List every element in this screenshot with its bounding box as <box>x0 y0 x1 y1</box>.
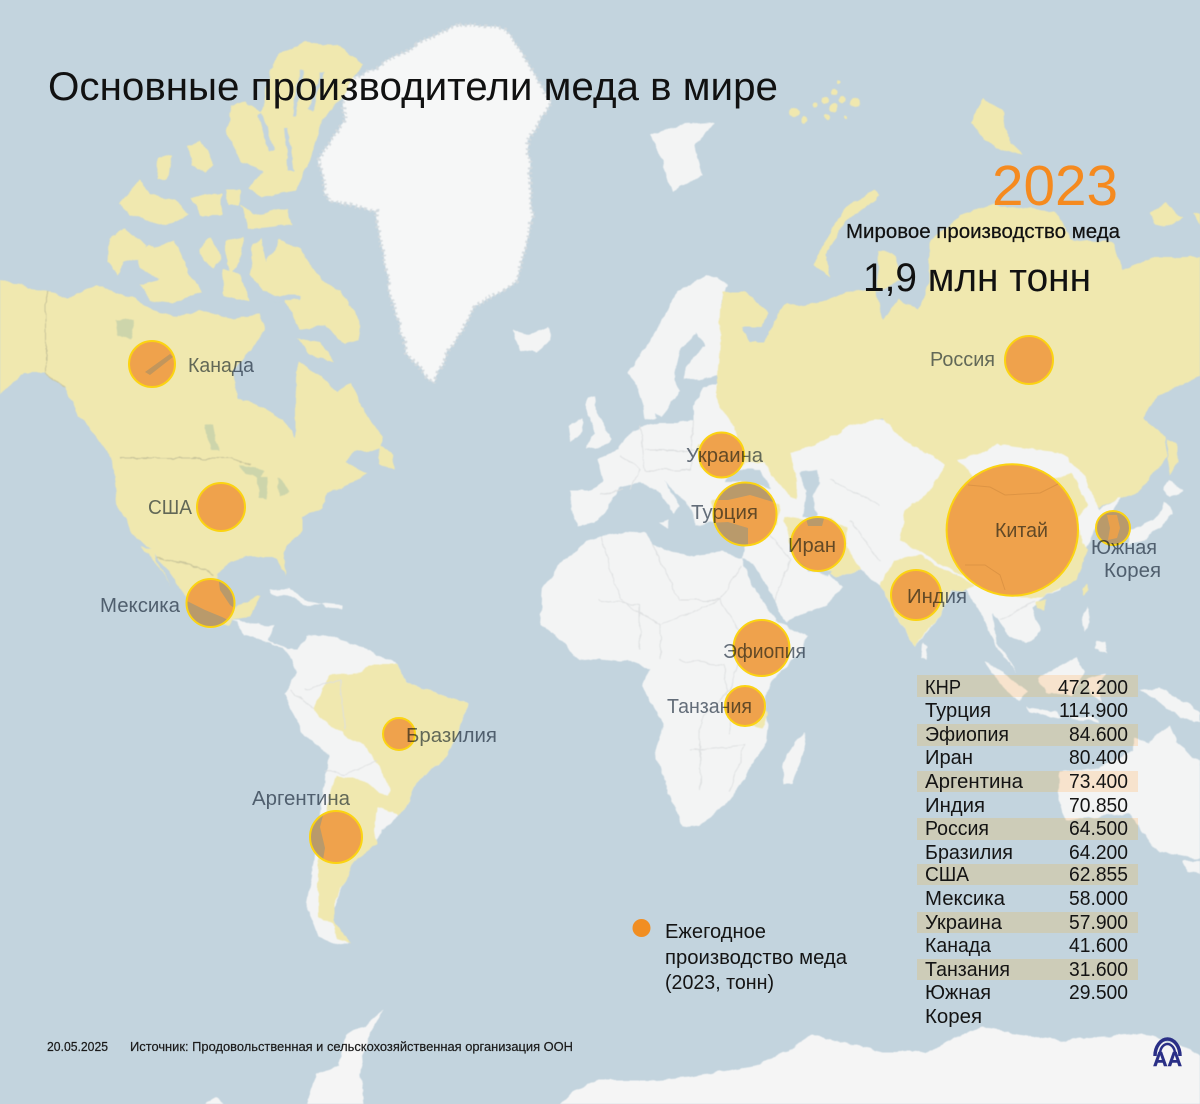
country names: Мексика <box>925 888 1006 910</box>
country names: Турция <box>925 700 991 722</box>
Arctic island <box>226 237 245 275</box>
country names: Индия <box>925 795 985 817</box>
Banks Island <box>108 229 147 275</box>
icon: AA logo <box>1153 1039 1182 1071</box>
label: Украина: Украина <box>686 445 764 467</box>
country names: Корея <box>925 1006 982 1028</box>
Caspian Sea <box>798 470 820 517</box>
bubble: Аргентина <box>308 808 362 866</box>
Somerset Island <box>222 268 250 300</box>
label: Россия: Россия <box>930 349 995 371</box>
bubble: Мексика <box>186 578 236 628</box>
legend <box>632 919 848 994</box>
Hispaniola <box>322 603 343 609</box>
label: Иран: Иран <box>788 535 836 557</box>
bubble: Индия <box>891 570 941 620</box>
source: Источник: Продовольственная и сельскохозяйственная организация ООН <box>130 1040 573 1054</box>
Scandinavia <box>627 275 728 415</box>
Hokkaido <box>1164 480 1183 497</box>
production values: 57.900 <box>1069 912 1128 934</box>
country border lines <box>46 292 250 575</box>
production values: 84.600 <box>1069 724 1128 746</box>
inland seas and bays <box>258 70 833 576</box>
Central and South America base <box>233 619 467 945</box>
Iceland <box>513 327 551 352</box>
production values: 70.850 <box>1069 795 1128 817</box>
summary: world production <box>846 154 1121 300</box>
Tasmania <box>1182 860 1200 874</box>
label: Эфиопия: Эфиопия <box>723 641 806 663</box>
label: Бразилия: Бразилия <box>406 725 497 747</box>
production values: 62.855 <box>1069 864 1128 886</box>
Greenland <box>318 24 551 382</box>
Novaya Zemlya <box>814 190 879 278</box>
Svalbard <box>650 122 715 192</box>
India <box>881 555 975 647</box>
New Guinea <box>1140 687 1200 722</box>
Taiwan <box>1083 583 1089 597</box>
Madagascar <box>782 732 805 784</box>
production values: 58.000 <box>1069 888 1128 910</box>
Cuba <box>270 588 322 604</box>
Victoria Island <box>135 240 203 303</box>
lakes <box>115 320 290 498</box>
Africa <box>540 532 808 827</box>
label: США: США <box>148 497 193 519</box>
Borneo <box>1038 657 1085 695</box>
production values: 73.400 <box>1069 771 1128 793</box>
bubble: Канада <box>129 341 175 387</box>
subtitle: Мировое производство меда <box>846 221 1121 243</box>
production values: 29.500 <box>1069 982 1128 1004</box>
Iran <box>785 517 860 577</box>
Brazil <box>314 665 467 816</box>
production values: 41.600 <box>1069 935 1128 957</box>
New Siberian Islands <box>1151 203 1182 226</box>
Sakhalin <box>1167 440 1178 475</box>
production values <box>1058 677 1128 1004</box>
Ukraine <box>698 437 745 475</box>
icon: AA logo: AA <box>1153 1049 1182 1071</box>
bubble: Китай <box>947 464 1078 596</box>
country names: Бразилия <box>925 842 1013 864</box>
country names: Россия <box>925 818 989 840</box>
bubble: Украина <box>699 432 744 478</box>
title: Основные производители меда в мире <box>48 65 778 109</box>
Baffin Island <box>250 238 361 345</box>
country names: Иран <box>925 747 973 769</box>
legend text: Ежегодное <box>665 921 766 943</box>
Devon island <box>241 204 291 229</box>
country names: КНР <box>925 677 961 699</box>
Turkey <box>712 497 780 525</box>
legend text: (2023, тонн) <box>665 972 774 994</box>
Arctic island <box>191 194 222 215</box>
Lesser Sunda <box>1070 716 1100 722</box>
Newfoundland <box>378 445 396 470</box>
country names: США <box>925 864 970 886</box>
country names: Танзания <box>925 959 1010 981</box>
Mongolia <box>957 443 1080 485</box>
Sicily <box>658 520 670 529</box>
label: Южная Корея <box>1091 537 1161 582</box>
production values: 64.200 <box>1069 842 1128 864</box>
Hainan <box>1036 600 1046 610</box>
production values: 80.400 <box>1069 747 1128 769</box>
legend dot <box>632 919 650 937</box>
Sri Lanka <box>921 643 928 660</box>
Honshu <box>1128 501 1173 545</box>
Sumatra <box>985 662 1027 702</box>
land showing through the stripes <box>994 675 1138 826</box>
date: 20.05.2025 <box>47 1040 108 1054</box>
Antarctica <box>555 1027 1200 1104</box>
Antarctic island <box>198 1097 232 1104</box>
China <box>900 455 1087 597</box>
legend text: производство меда <box>665 947 848 969</box>
country names: Эфиопия <box>925 724 1009 746</box>
Arctic island <box>199 237 222 268</box>
bubble: Турция <box>712 482 778 546</box>
country names: Аргентина <box>925 771 1024 793</box>
Baja California <box>140 547 170 587</box>
Persian Gulf <box>798 558 833 576</box>
Argentina <box>318 777 387 943</box>
Yamal peninsula <box>877 250 902 292</box>
Arctic channels <box>258 113 274 152</box>
label: Китай: Китай <box>995 520 1048 542</box>
bubble: Россия <box>1005 336 1053 384</box>
Great Britain <box>585 395 612 450</box>
Black Sea <box>725 470 772 490</box>
bubble: Бразилия <box>383 718 415 750</box>
production values: 472.200 <box>1058 677 1128 699</box>
year: 2023 <box>992 154 1118 218</box>
Philippines <box>1083 607 1090 632</box>
bubble: Эфиопия <box>734 620 790 676</box>
country names <box>925 677 1024 1028</box>
bubble: Южная Корея <box>1096 511 1130 545</box>
Antarctic Peninsula <box>306 1010 383 1104</box>
Java <box>1027 707 1062 718</box>
label: Мексика: Мексика <box>100 595 181 617</box>
label: Турция: Турция <box>691 502 758 524</box>
label: Канада: Канада <box>188 355 255 377</box>
North America mainland <box>0 278 383 628</box>
Arctic islands west <box>119 180 188 225</box>
ranking table <box>917 675 1138 1027</box>
row stripes <box>917 675 1138 980</box>
Australia <box>1059 726 1200 860</box>
Tanzania <box>732 695 768 728</box>
Ethiopia <box>745 630 785 668</box>
production values: 31.600 <box>1069 959 1128 981</box>
Arctic island <box>157 155 172 178</box>
label: Южная Корея: Южная <box>1091 537 1157 559</box>
label: Аргентина: Аргентина <box>252 788 351 810</box>
legend text <box>665 921 848 994</box>
country names: Южная <box>925 982 991 1004</box>
Franz Josef Land <box>790 80 861 123</box>
bubble: Иран <box>790 516 846 572</box>
Eurasia base <box>570 383 1122 673</box>
Severnaya Zemlya <box>971 99 1022 155</box>
Denmark <box>643 400 657 420</box>
Wrangel area <box>1192 212 1200 232</box>
label: Индия: Индия <box>907 586 967 608</box>
bubble: США <box>197 483 245 531</box>
country names: Канада <box>925 935 992 957</box>
Arctic island <box>188 141 214 173</box>
country names: Украина <box>925 912 1003 934</box>
Russia <box>717 204 1200 508</box>
bubble: Танзания <box>725 686 765 726</box>
North Korea <box>1100 498 1120 518</box>
Southampton Island <box>298 338 335 362</box>
Ireland <box>568 418 583 442</box>
total: 1,9 млн тонн <box>863 256 1091 300</box>
Mongolia and Korea <box>957 443 1120 518</box>
Mindanao <box>1095 640 1108 655</box>
label: Южная Корея: Корея <box>1104 560 1161 582</box>
label: Танзания: Танзания <box>667 696 752 718</box>
Arctic island <box>225 190 240 205</box>
Ellesmere and northern islands <box>226 42 364 197</box>
production values: 64.500 <box>1069 818 1128 840</box>
production values: 114.900 <box>1059 700 1128 722</box>
Sulawesi <box>1085 675 1105 702</box>
